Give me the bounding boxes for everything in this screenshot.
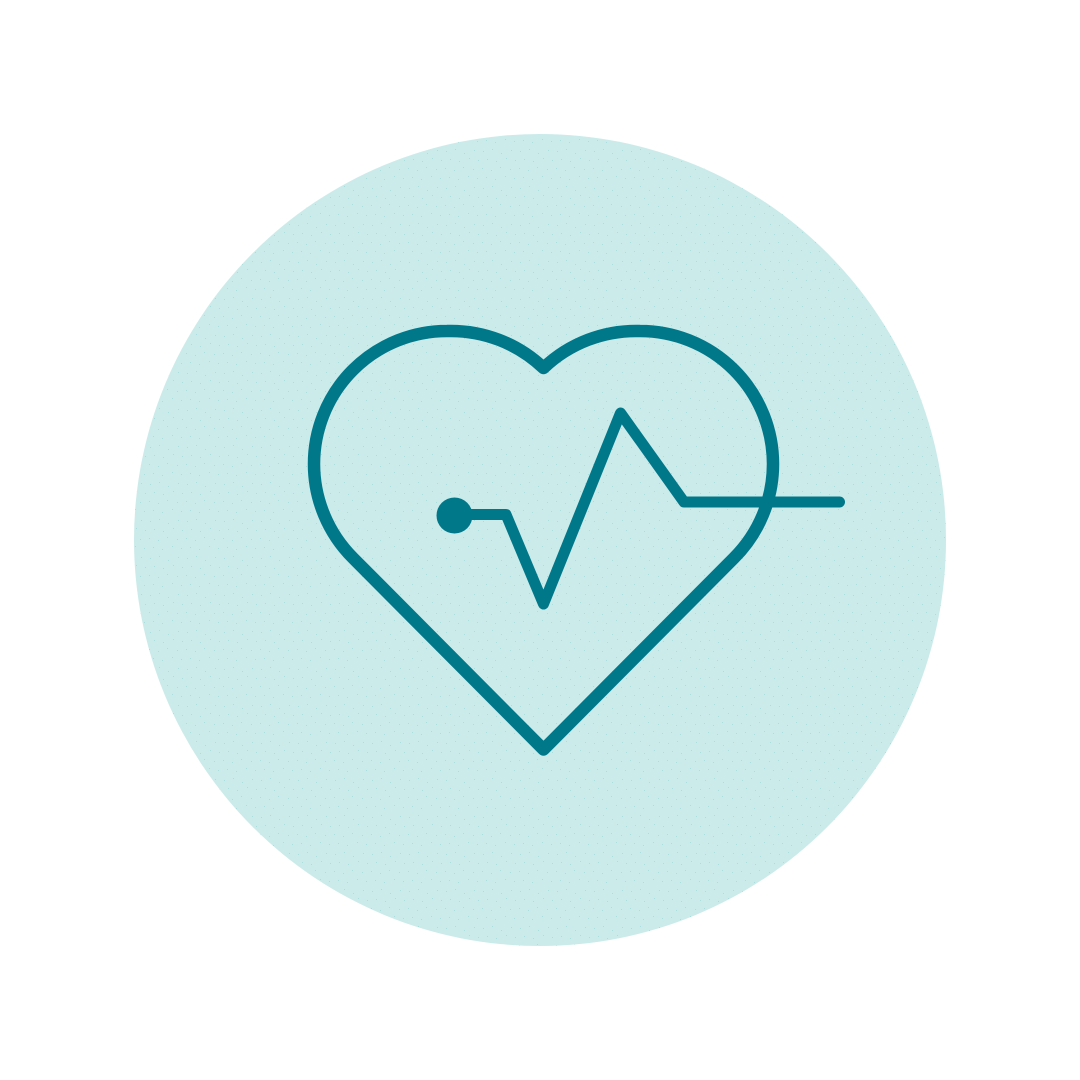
pulse line	[454, 413, 840, 604]
background circle	[134, 134, 946, 946]
heart outline	[314, 331, 773, 750]
pulse start dot	[436, 498, 472, 534]
icon: heart with pulse line	[314, 331, 840, 750]
